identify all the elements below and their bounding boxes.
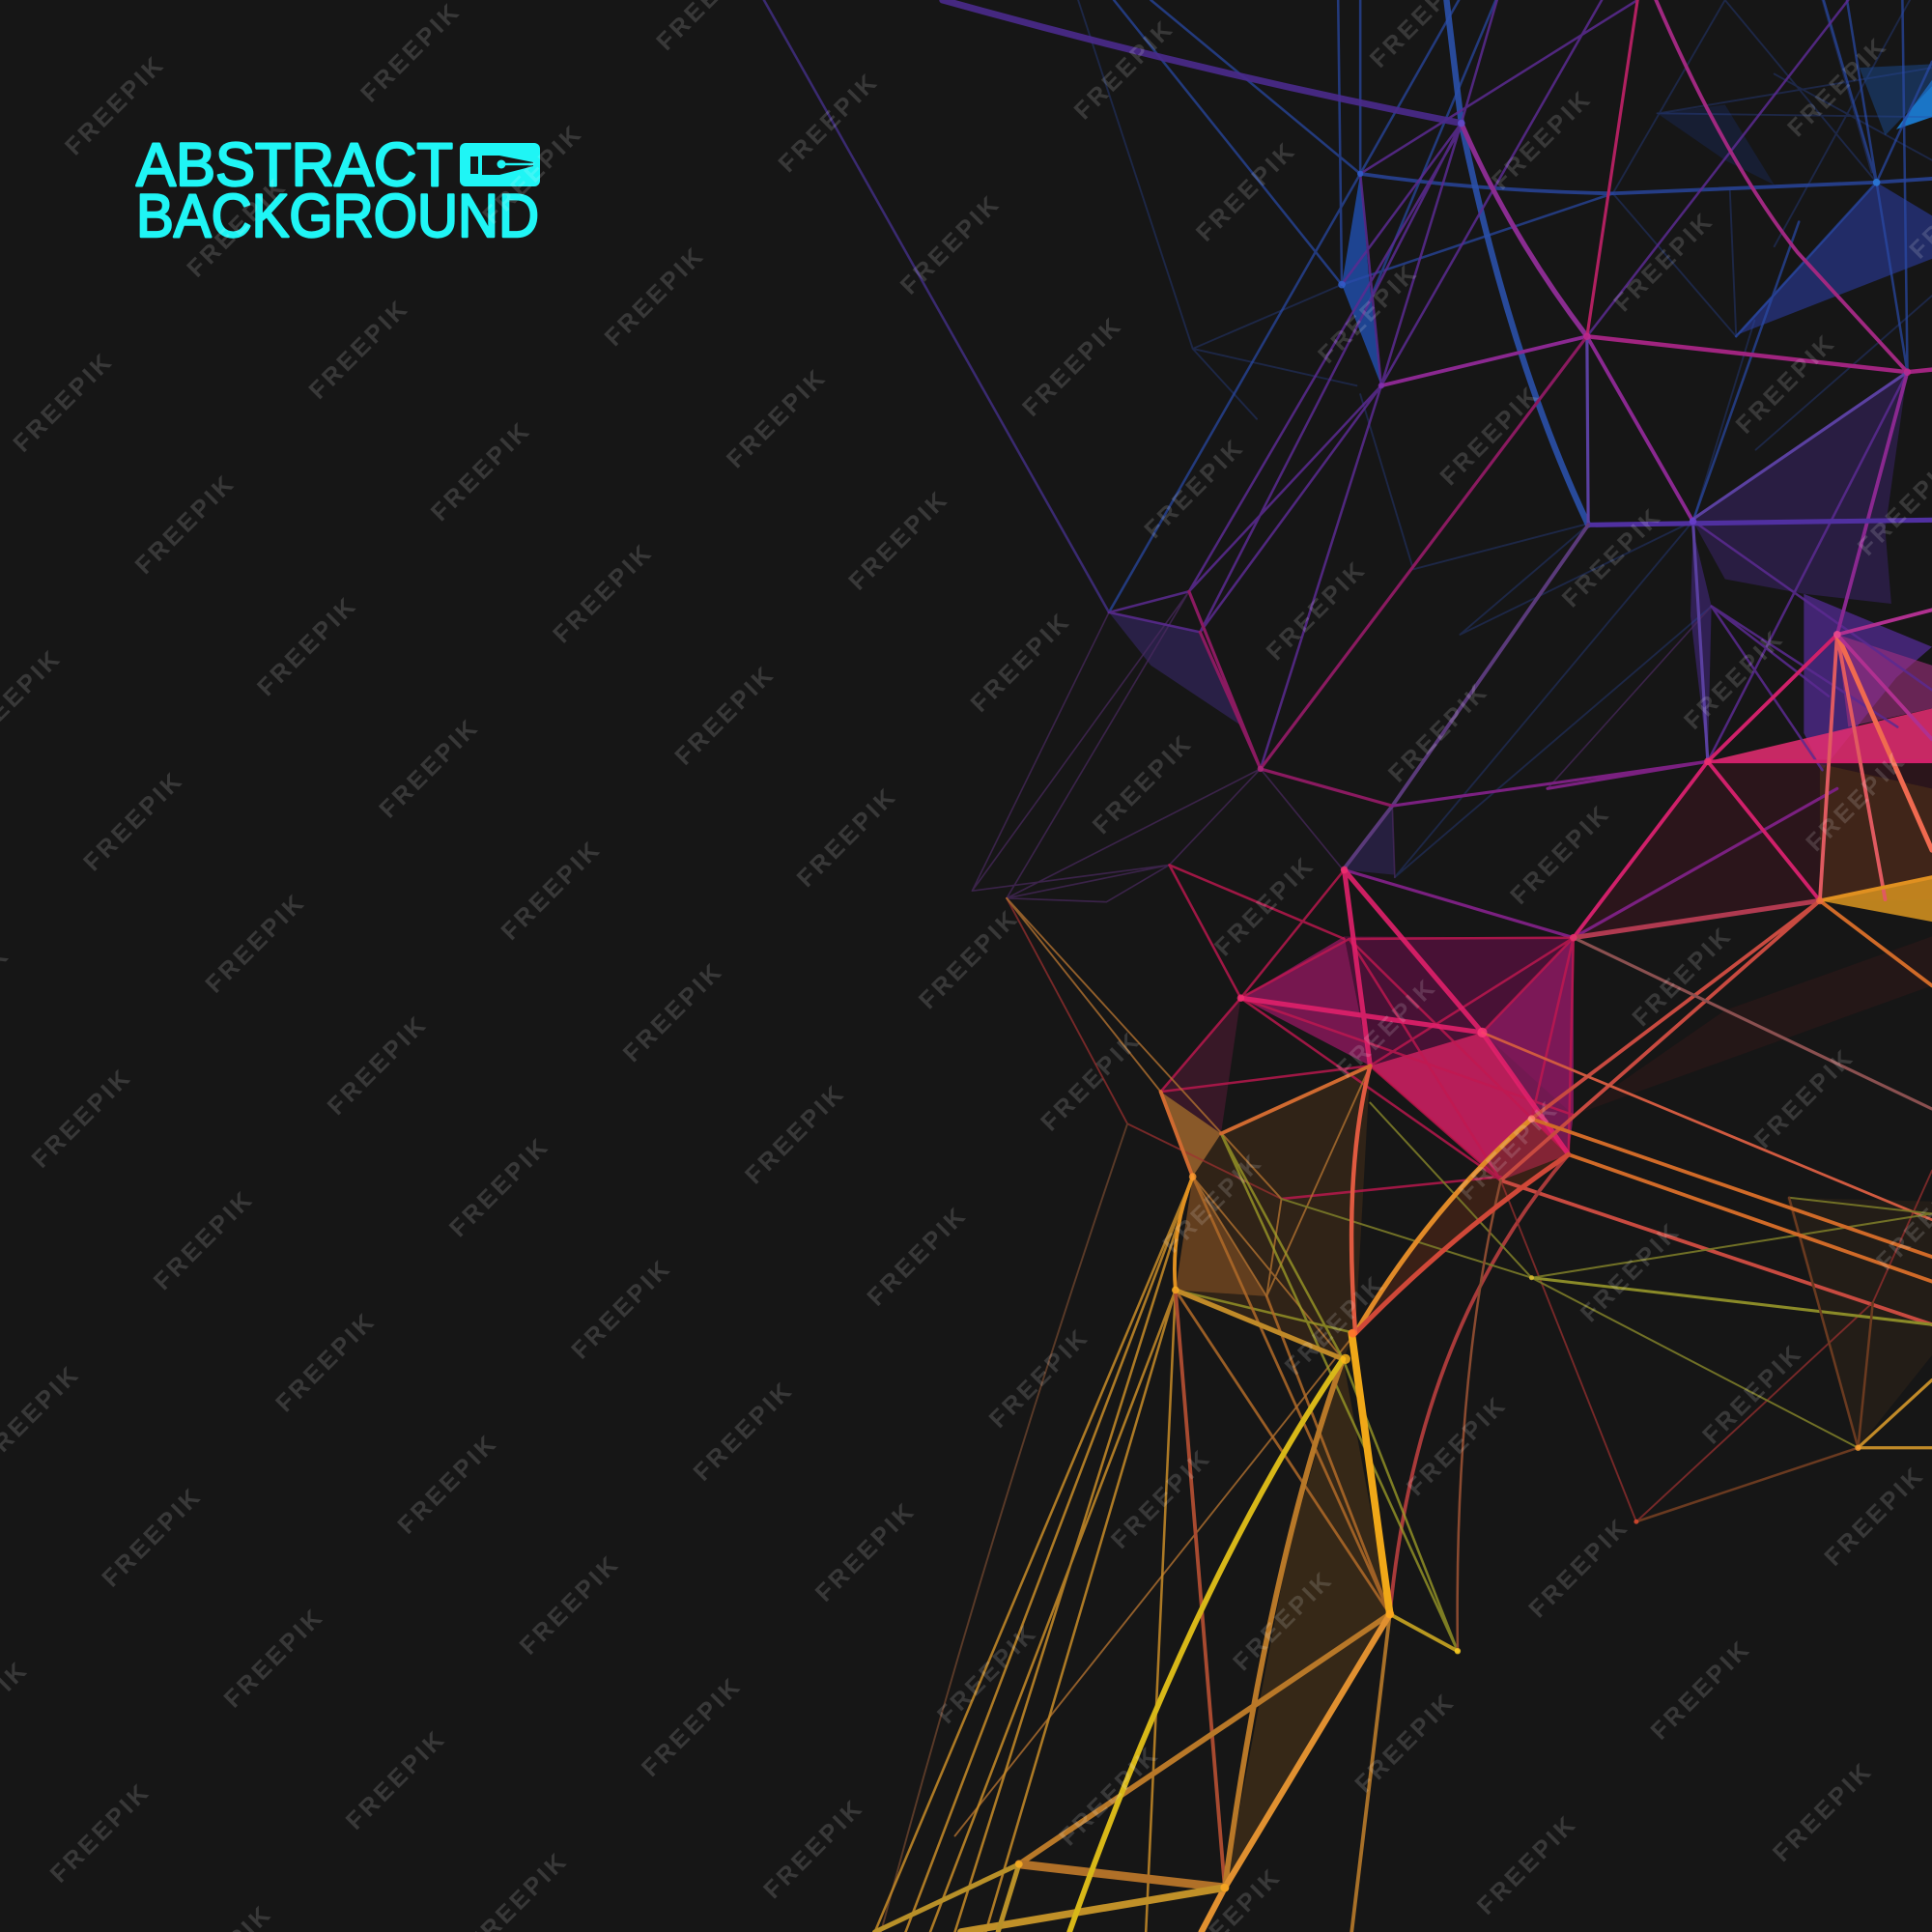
mesh node dots <box>1015 120 1911 1892</box>
FREEPIK watermark grid: FREEPIK <box>1697 1339 1808 1450</box>
FREEPIK watermark grid: FREEPIK <box>914 904 1024 1014</box>
FREEPIK watermark grid: FREEPIK <box>810 1496 921 1607</box>
FREEPIK watermark grid: FREEPIK <box>637 1672 747 1782</box>
FREEPIK watermark grid: FREEPIK <box>1749 1043 1860 1153</box>
FREEPIK watermark grid: FREEPIK <box>843 485 954 596</box>
FREEPIK watermark grid: FREEPIK <box>1472 1809 1582 1920</box>
FREEPIK watermark grid: FREEPIK <box>1782 32 1893 142</box>
FREEPIK watermark grid: FREEPIK <box>618 957 728 1067</box>
FREEPIK watermark grid: FREEPIK <box>1402 1391 1513 1501</box>
FREEPIK watermark grid: FREEPIK <box>1350 1688 1461 1798</box>
FREEPIK watermark grid: FREEPIK <box>1088 729 1198 839</box>
translucent mesh fills <box>1109 64 1932 1888</box>
FREEPIK watermark grid: FREEPIK <box>1608 207 1719 317</box>
FREEPIK watermark grid: FREEPIK <box>45 1777 156 1889</box>
FREEPIK watermark grid: FREEPIK <box>1383 677 1493 788</box>
FREEPIK watermark grid: FREEPIK <box>252 591 363 701</box>
FREEPIK watermark grid: FREEPIK <box>689 1376 799 1487</box>
FREEPIK watermark grid: FREEPIK <box>341 1724 451 1835</box>
FREEPIK watermark grid: FREEPIK <box>1262 555 1372 666</box>
FREEPIK watermark grid: FREEPIK <box>1820 1461 1930 1572</box>
FREEPIK watermark grid: FREEPIK <box>984 1323 1094 1434</box>
FREEPIK watermark grid: FREEPIK <box>1228 1566 1339 1676</box>
FREEPIK watermark grid: FREEPIK <box>270 1307 382 1417</box>
FREEPIK watermark grid: FREEPIK <box>1523 1513 1634 1623</box>
FREEPIK watermark grid: FREEPIK <box>1313 259 1424 369</box>
FREEPIK watermark grid: FREEPIK <box>27 1063 137 1174</box>
FREEPIK watermark grid: FREEPIK <box>393 1429 503 1540</box>
FREEPIK watermark grid: FREEPIK <box>1679 624 1790 735</box>
title logo: Abstract Background <box>136 131 540 250</box>
FREEPIK watermark grid: FREEPIK <box>566 1254 677 1364</box>
FREEPIK watermark grid: FREEPIK <box>515 1549 625 1661</box>
FREEPIK watermark grid: FREEPIK <box>1054 1741 1165 1851</box>
FREEPIK watermark grid: FREEPIK <box>722 363 832 473</box>
FREEPIK watermark grid: FREEPIK <box>1158 1148 1268 1259</box>
FREEPIK watermark grid: FREEPIK <box>863 1201 973 1312</box>
FREEPIK watermark grid: FREEPIK <box>426 416 536 526</box>
purple and magenta mesh lines <box>764 0 1932 938</box>
FREEPIK watermark grid: FREEPIK <box>1331 973 1442 1084</box>
FREEPIK watermark grid: FREEPIK <box>966 607 1076 718</box>
FREEPIK watermark grid: FREEPIK <box>932 1619 1043 1729</box>
FREEPIK watermark grid: FREEPIK <box>478 119 588 230</box>
FREEPIK watermark grid: FREEPIK <box>670 660 781 771</box>
FREEPIK watermark grid: FREEPIK <box>1646 1634 1756 1746</box>
FREEPIK watermark grid: FREEPIK <box>1505 799 1616 910</box>
pink and red mesh lines <box>1007 610 1932 1614</box>
title line 2: BACKGROUND <box>136 183 539 250</box>
FREEPIK watermark grid: FREEPIK <box>323 1010 433 1121</box>
FREEPIK watermark grid: FREEPIK <box>774 68 884 178</box>
FREEPIK watermark grid: FREEPIK <box>374 713 485 824</box>
FREEPIK watermark grid: FREEPIK <box>1435 381 1546 491</box>
FREEPIK watermark grid: FREEPIK <box>1017 311 1128 422</box>
FREEPIK watermark grid: FREEPIK <box>1454 1095 1564 1206</box>
FREEPIK watermark grid: FREEPIK <box>895 189 1006 299</box>
FREEPIK watermark grid: FREEPIK <box>9 347 119 458</box>
FREEPIK watermark grid: FREEPIK <box>792 782 902 893</box>
FREEPIK watermark grid: FREEPIK <box>1069 14 1179 125</box>
FREEPIK watermark grid: FREEPIK <box>1487 85 1598 195</box>
FREEPIK watermark grid: FREEPIK <box>355 0 467 107</box>
FREEPIK watermark grid: FREEPIK <box>548 538 659 648</box>
FREEPIK watermark grid: FREEPIK <box>60 50 171 160</box>
FREEPIK watermark grid: FREEPIK <box>304 295 414 405</box>
FREEPIK watermark grid: FREEPIK <box>1731 328 1841 440</box>
FREEPIK watermark grid: FREEPIK <box>1140 434 1250 544</box>
icon: pen nib badge <box>460 143 540 186</box>
FREEPIK watermark grid: FREEPIK <box>1768 1757 1878 1867</box>
blue mesh lines, upper area <box>1078 0 1932 877</box>
FREEPIK watermark grid: FREEPIK <box>1557 502 1667 612</box>
FREEPIK watermark grid: FREEPIK <box>78 766 189 876</box>
FREEPIK watermark grid: FREEPIK <box>1801 747 1912 857</box>
FREEPIK watermark grid: FREEPIK <box>740 1079 851 1189</box>
FREEPIK watermark grid: FREEPIK <box>600 242 710 352</box>
FREEPIK watermark grid: FREEPIK <box>1106 1444 1216 1554</box>
FREEPIK watermark grid: FREEPIK <box>444 1132 554 1242</box>
polygon mesh artwork <box>764 0 1932 1932</box>
title line 1: ABSTRACT <box>136 131 453 199</box>
FREEPIK watermark grid: FREEPIK <box>219 1603 329 1713</box>
FREEPIK watermark grid: FREEPIK <box>1036 1026 1147 1137</box>
FREEPIK watermark grid: FREEPIK <box>497 835 607 946</box>
FREEPIK watermark grid: FREEPIK <box>182 172 293 283</box>
FREEPIK watermark grid: FREEPIK <box>758 1794 869 1904</box>
orange and yellow mesh lines, lower area <box>875 877 1932 1932</box>
FREEPIK watermark grid: FREEPIK <box>1209 851 1321 961</box>
FREEPIK watermark grid: FREEPIK <box>149 1185 259 1295</box>
FREEPIK watermark grid: FREEPIK <box>97 1482 208 1592</box>
FREEPIK watermark grid: FREEPIK <box>1280 1270 1390 1380</box>
FREEPIK watermark grid: FREEPIK <box>1191 136 1301 247</box>
FREEPIK watermark grid: FREEPIK <box>201 888 311 999</box>
FREEPIK watermark grid: FREEPIK <box>1628 922 1738 1032</box>
FREEPIK watermark grid: FREEPIK <box>1576 1217 1686 1327</box>
FREEPIK watermark grid: FREEPIK <box>130 469 241 580</box>
